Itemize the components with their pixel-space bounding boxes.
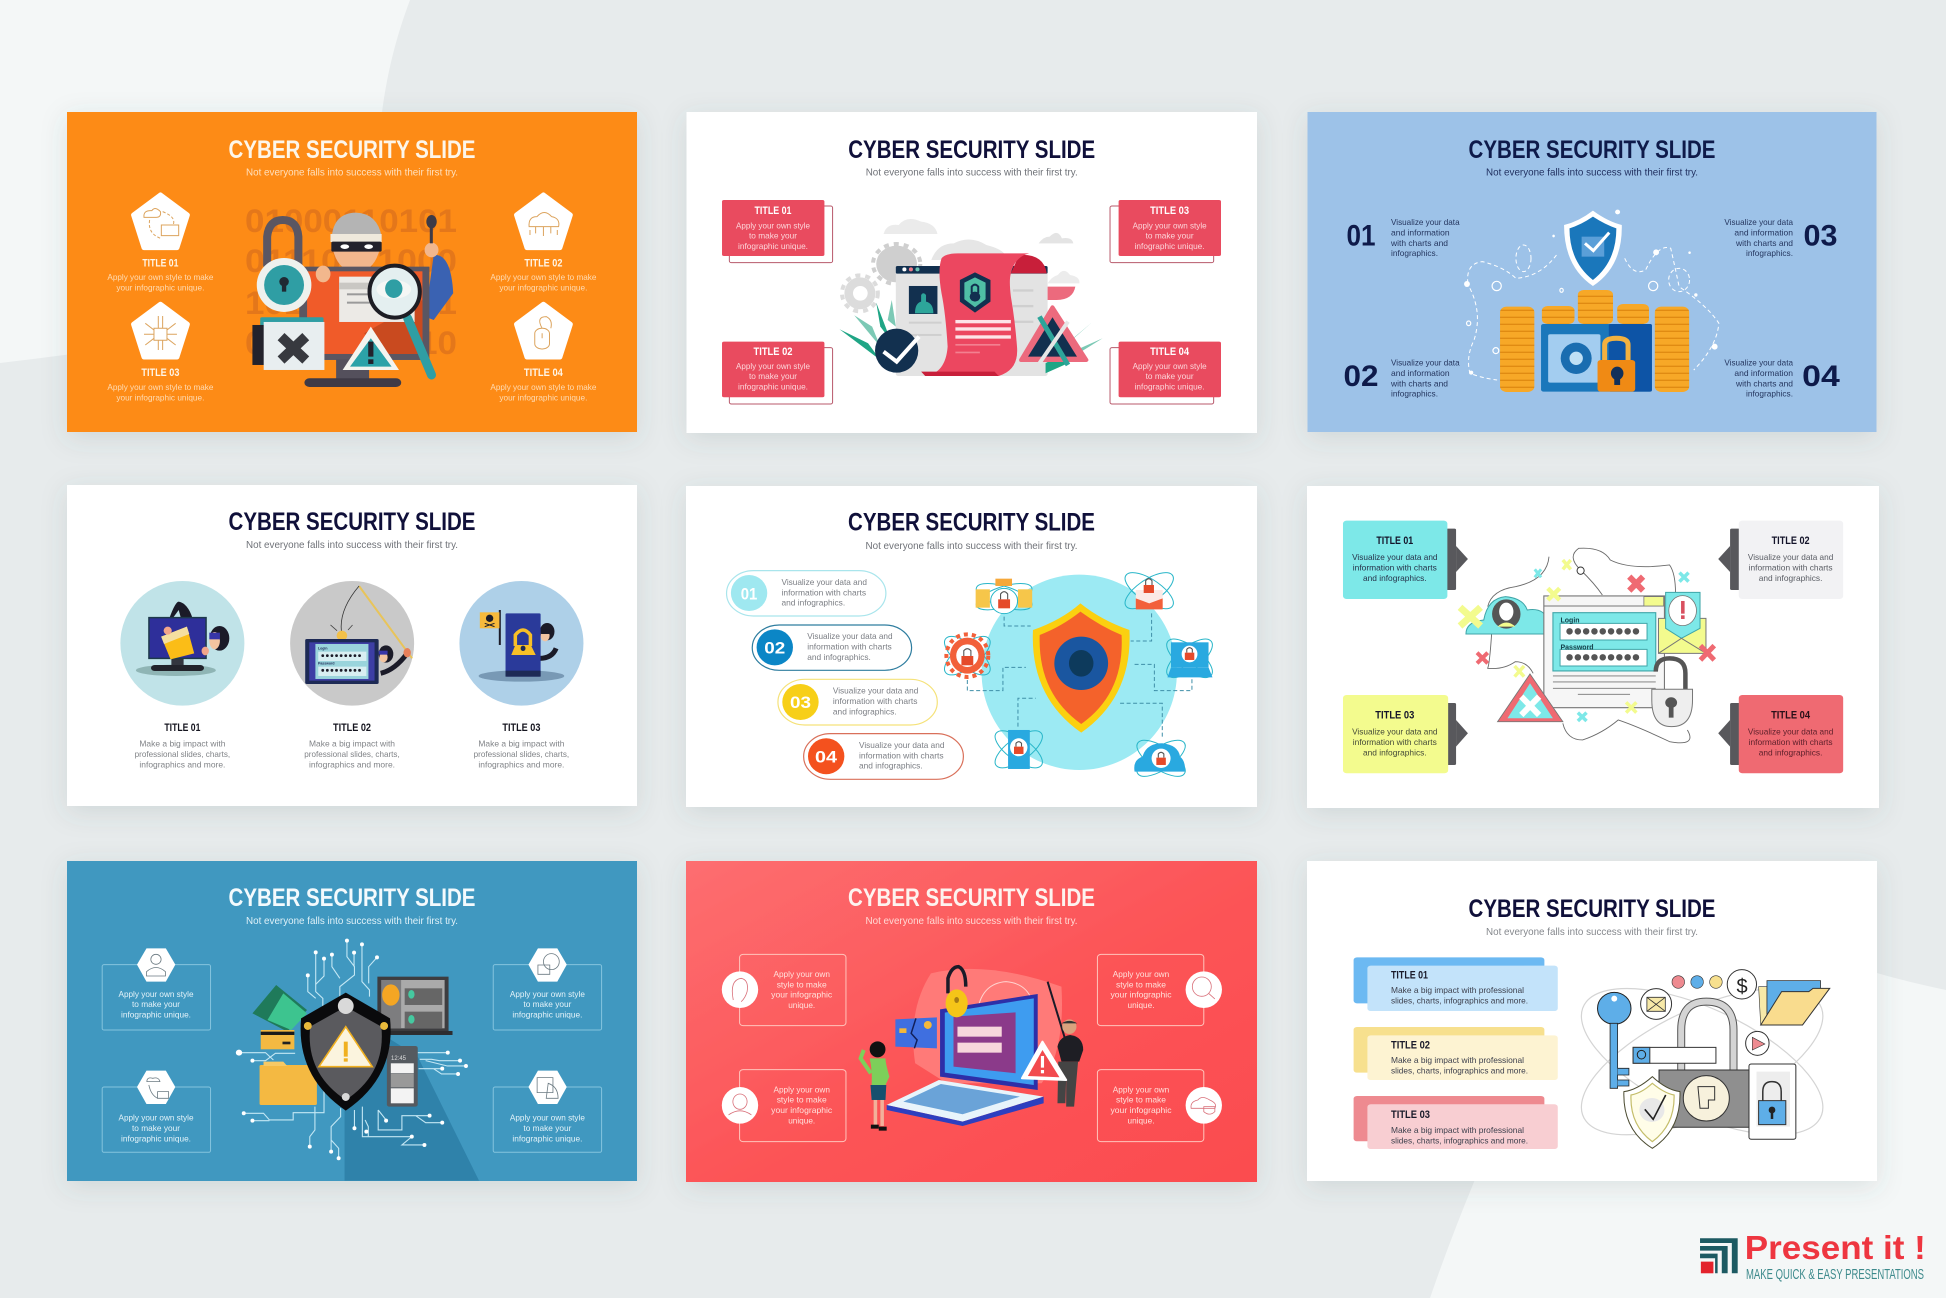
box text: top right: Apply your own style [510, 989, 585, 999]
item: title 01: Apply your own style to make [107, 272, 214, 282]
item 04: infographics. [1746, 388, 1793, 398]
pill 01 text: information with charts [782, 587, 866, 597]
subtitle: Not everyone falls into success with their first try. [1486, 166, 1698, 178]
card text: title 04: to make your [1146, 371, 1194, 381]
item 03: and information [1734, 228, 1793, 238]
heading: CYBER SECURITY SLIDE [228, 884, 476, 912]
subtitle: Not everyone falls into success with their first try. [1486, 926, 1698, 938]
circle: phishing login [290, 581, 414, 706]
card text: title 04: information with charts [1749, 737, 1833, 747]
pill 01 text: 01 [741, 584, 757, 604]
box text: bottom right: unique. [1128, 1115, 1154, 1125]
card text: title 02: infographic unique. [738, 382, 808, 392]
item 03: 03 [1804, 220, 1838, 253]
item: title 01: Make a big impact with [139, 738, 226, 748]
item 02: 02 [1344, 360, 1378, 393]
heading: CYBER SECURITY SLIDE [228, 508, 476, 536]
card text: title 03 [1352, 710, 1438, 757]
card text: title 02 [736, 346, 810, 392]
box text: bottom right: to make your [523, 1123, 572, 1133]
side cards [1343, 521, 1843, 773]
item: title 02: infographics and more. [309, 760, 395, 770]
box text: top right [1110, 969, 1172, 1010]
pill 02 text: and infographics. [807, 652, 871, 662]
subtitle: Not everyone falls into success with their first try. [866, 166, 1078, 178]
item 04: with charts and [1735, 378, 1793, 388]
item: title 03: Make a big impact with [478, 738, 565, 748]
box text: top left [118, 989, 194, 1020]
item: title 01: your infographic unique. [116, 282, 204, 292]
illustration: secure document [840, 219, 1103, 376]
item: title 02: professional slides, charts, [304, 749, 400, 759]
item 04: and information [1734, 368, 1793, 378]
heading: CYBER SECURITY SLIDE [1468, 136, 1716, 164]
box text: top left: Apply your own [773, 969, 830, 979]
card text: title 04: Visualize your data and [1748, 726, 1834, 736]
pill shapes [727, 571, 963, 779]
subtitle: Not everyone falls into success with their first try. [246, 166, 458, 178]
card text: title 04: TITLE 04 [1150, 346, 1190, 358]
box text: top left: Apply your own style [118, 989, 194, 999]
box text: top right: your infographic [1110, 990, 1172, 1000]
item: title 03: infographics and more. [478, 760, 564, 770]
pill 02 text [764, 631, 893, 662]
card text: title 01 [736, 205, 810, 251]
item 01 [1346, 217, 1460, 258]
pill 01 text [741, 577, 867, 608]
illustration: login window [1460, 548, 1714, 743]
pill 03 text: 03 [790, 693, 811, 712]
item: title 02 [304, 722, 400, 770]
login form labels [318, 646, 335, 666]
bar text: title 01: slides, charts, infographics and more. [1391, 996, 1528, 1006]
panel: white slide with side cards and login [1307, 486, 1879, 808]
item 02: with charts and [1390, 378, 1448, 388]
form labels: Login [1560, 618, 1580, 624]
card text: title 03 [1133, 205, 1207, 251]
box text: top left: style to make [777, 979, 827, 989]
card text: title 01: Apply your own style [736, 220, 810, 230]
card text: title 01: TITLE 01 [1376, 535, 1413, 547]
box text: bottom left: unique. [788, 1115, 815, 1125]
box text: top right: to make your [523, 999, 572, 1009]
login form labels: Login [318, 646, 328, 650]
bar text: title 02: slides, charts, infographics and more. [1391, 1065, 1528, 1075]
binary digits backdrop: 01000110101 [245, 203, 457, 239]
box text: bottom right: Apply your own [1113, 1085, 1170, 1095]
card text: title 04: and infographics. [1759, 747, 1822, 757]
card text: title 03: information with charts [1353, 737, 1437, 747]
card text: title 03: TITLE 03 [1150, 205, 1189, 217]
card text: title 01: TITLE 01 [754, 205, 792, 217]
heading: CYBER SECURITY SLIDE [848, 509, 1095, 537]
dollar symbol: $ [1736, 976, 1748, 998]
item 03: with charts and [1735, 238, 1793, 248]
binary digits backdrop: 01001011010 [245, 325, 457, 361]
box text: top left: your infographic [771, 990, 833, 1000]
box text: bottom left [118, 1112, 194, 1144]
item 01: 01 [1346, 220, 1376, 253]
box text: bottom left: your infographic [771, 1105, 833, 1115]
box text: bottom left [771, 1085, 833, 1125]
binary digits backdrop: 10110100101 [245, 285, 457, 321]
box text: top right: Apply your own [1113, 969, 1170, 979]
item 01: and information [1391, 228, 1450, 238]
item: title 01 [107, 258, 214, 292]
item: title 03: TITLE 03 [141, 367, 179, 379]
pill 01 text: Visualize your data and [782, 577, 867, 587]
panel: blue slide with numbers [1308, 112, 1876, 432]
card text: title 01: Visualize your data and [1352, 552, 1438, 562]
bar text: title 01: Make a big impact with professional [1391, 985, 1524, 995]
card text: title 01: and infographics. [1363, 573, 1427, 583]
card text: title 03: Apply your own style [1133, 220, 1207, 230]
box text: bottom right: style to make [1116, 1095, 1166, 1105]
brand name: Present it ! [1745, 1229, 1926, 1266]
box text: bottom right: your infographic [1110, 1105, 1172, 1115]
bar text: title 02 [1391, 1040, 1528, 1075]
subtitle: Not everyone falls into success with their first try. [866, 540, 1078, 552]
icon pentagons [134, 195, 570, 357]
pill 04 text: Visualize your data and [859, 740, 945, 750]
card text: title 02: TITLE 02 [754, 346, 792, 358]
pill 04 text: and infographics. [859, 761, 923, 771]
item: title 03: professional slides, charts, [474, 749, 569, 759]
pill 02 text: information with charts [807, 641, 892, 651]
logo: Present it! [1700, 1229, 1926, 1283]
logo mark [1700, 1238, 1738, 1273]
box text: top right: infographic unique. [512, 1010, 582, 1020]
box text: top left [771, 969, 833, 1010]
item: title 01: infographics and more. [139, 760, 225, 770]
panel: white slide with layered bars [1307, 861, 1877, 1181]
card text: title 03: to make your [1146, 230, 1194, 240]
item 01: Visualize your data [1391, 217, 1460, 227]
panel: teal slide with hexagon boxes [67, 861, 637, 1181]
illustration: hacker at monitor [252, 213, 453, 387]
item: title 02: your infographic unique. [499, 282, 587, 292]
box text: top left: to make your [132, 999, 180, 1009]
item: title 01: TITLE 01 [142, 258, 178, 270]
box text: top right [510, 989, 585, 1020]
pill 01 text: and infographics. [782, 598, 845, 608]
card text: title 04: TITLE 04 [1771, 710, 1811, 722]
item: title 03: TITLE 03 [502, 722, 540, 734]
card text: title 02: Visualize your data and [1748, 552, 1834, 562]
card text: title 01: infographic unique. [738, 241, 808, 251]
outlined boxes with circular icons [722, 954, 1222, 1142]
pill 04 text: 04 [815, 748, 838, 766]
form labels [1560, 618, 1594, 652]
item: title 01 [135, 722, 230, 770]
item: title 04: TITLE 04 [524, 367, 564, 379]
pill 04 text [815, 740, 945, 771]
login form labels: Password [318, 662, 335, 666]
panel: red slide with laptop [686, 861, 1257, 1182]
item 04: Visualize your data [1724, 358, 1793, 368]
illustration: padlock, key and shield [1552, 960, 1852, 1163]
box text: top right: unique. [1128, 1000, 1154, 1010]
box text: bottom left: infographic unique. [121, 1134, 191, 1144]
box text: bottom left: to make your [132, 1123, 180, 1133]
layered bars [1354, 957, 1558, 1149]
box text: bottom right [510, 1112, 585, 1144]
heading: CYBER SECURITY SLIDE [228, 136, 476, 164]
box text: bottom left: Apply your own [773, 1085, 830, 1095]
box text: top left: infographic unique. [121, 1010, 191, 1020]
box text: bottom right [1110, 1085, 1172, 1125]
card text: title 02 [1748, 535, 1834, 583]
item: title 01: professional slides, charts, [135, 749, 230, 759]
pill 03 text: and infographics. [833, 706, 897, 716]
item 01: with charts and [1390, 238, 1448, 248]
item: title 04: Apply your own style to make [490, 382, 597, 392]
box text: bottom right: Apply your own style [510, 1112, 585, 1122]
card text: title 04: Apply your own style [1133, 361, 1207, 371]
item: title 03 [107, 367, 214, 402]
box text: bottom right: infographic unique. [512, 1134, 582, 1144]
item: title 02: Make a big impact with [309, 738, 395, 748]
bar text: title 03: Make a big impact with professional [1391, 1125, 1524, 1135]
pill 02 text: 02 [764, 638, 785, 658]
item 04 [1724, 358, 1840, 398]
circle: hacker stealing folder [120, 581, 244, 706]
card text: title 03: Visualize your data and [1352, 726, 1438, 736]
item 03: Visualize your data [1724, 217, 1793, 227]
item 02: and information [1391, 368, 1450, 378]
subtitle: Not everyone falls into success with their first try. [246, 915, 458, 927]
card text: title 04: infographic unique. [1135, 382, 1205, 392]
panel: white slide with red cards [686, 112, 1257, 433]
form labels: Password [1560, 644, 1594, 652]
box text: bottom left: Apply your own style [118, 1112, 194, 1122]
bar text: title 03: TITLE 03 [1391, 1109, 1430, 1121]
item 03 [1724, 217, 1838, 258]
bar text: title 03 [1391, 1109, 1528, 1145]
item: title 02: Apply your own style to make [490, 272, 597, 282]
item 02: Visualize your data [1391, 358, 1460, 368]
binary digits backdrop [245, 203, 457, 361]
card text: title 04 [1748, 710, 1834, 757]
subtitle: Not everyone falls into success with their first try. [246, 539, 458, 551]
box text: top left: unique. [788, 1000, 815, 1010]
box text: bottom left: style to make [777, 1095, 827, 1105]
item: title 04 [490, 367, 597, 402]
item 03: infographics. [1746, 248, 1793, 258]
item: title 01: TITLE 01 [164, 722, 200, 734]
card text: title 01: to make your [749, 230, 797, 240]
illustration: shield over safe and coins [1464, 210, 1719, 392]
pill 04 text: information with charts [859, 750, 944, 760]
circle: locked phone [459, 581, 583, 706]
pill 03 text: Visualize your data and [833, 686, 919, 696]
panel: orange slide with pentagon icons [67, 112, 637, 432]
subtitle: Not everyone falls into success with their first try. [866, 915, 1078, 927]
illustration: circuit shield [236, 939, 479, 1181]
red cards [722, 200, 1221, 404]
box text: top right: style to make [1116, 979, 1166, 989]
pill 03 text: information with charts [833, 696, 918, 706]
item: title 03: your infographic unique. [116, 392, 204, 402]
bar text: title 02: TITLE 02 [1391, 1040, 1430, 1052]
bar text: title 03: slides, charts, infographics and more. [1391, 1135, 1528, 1145]
item: title 02: TITLE 02 [333, 722, 371, 734]
card text: title 01 [1352, 535, 1438, 583]
item: title 04: your infographic unique. [499, 392, 587, 402]
outlined boxes with hexagon icons [102, 948, 602, 1152]
item 01: infographics. [1391, 248, 1438, 258]
card text: title 04 [1133, 346, 1207, 392]
item: title 03: Apply your own style to make [107, 382, 214, 392]
phone clock: 12:45 [391, 1056, 407, 1062]
bar text: title 01 [1391, 970, 1528, 1006]
heading: CYBER SECURITY SLIDE [848, 884, 1095, 912]
heading: CYBER SECURITY SLIDE [1468, 895, 1716, 923]
card text: title 03: infographic unique. [1135, 241, 1205, 251]
card text: title 01: information with charts [1353, 562, 1437, 572]
heading: CYBER SECURITY SLIDE [848, 136, 1095, 164]
item 02 [1344, 358, 1460, 398]
card text: title 02: information with charts [1749, 562, 1833, 572]
illustration: shield network [937, 566, 1219, 783]
card text: title 02: and infographics. [1759, 573, 1822, 583]
card text: title 02: to make your [749, 371, 797, 381]
bar text: title 02: Make a big impact with professional [1391, 1055, 1524, 1065]
illustration: hacked laptop [861, 967, 1083, 1131]
panel: white slide with pills and shield [686, 486, 1257, 807]
pill 03 text [790, 686, 919, 716]
item 04: 04 [1802, 360, 1840, 393]
bar text: title 01: TITLE 01 [1391, 970, 1428, 982]
item: title 02 [490, 258, 597, 292]
card text: title 03: TITLE 03 [1375, 710, 1414, 722]
panel: white slide with three circles [67, 485, 637, 806]
item 02: infographics. [1391, 388, 1438, 398]
binary digits backdrop: 01110111000 [245, 243, 457, 279]
card text: title 03: and infographics. [1363, 747, 1427, 757]
item: title 03 [474, 722, 569, 770]
item: title 02: TITLE 02 [524, 258, 562, 270]
card text: title 02: TITLE 02 [1772, 535, 1810, 547]
card text: title 02: Apply your own style [736, 361, 810, 371]
pill 02 text: Visualize your data and [807, 631, 893, 641]
